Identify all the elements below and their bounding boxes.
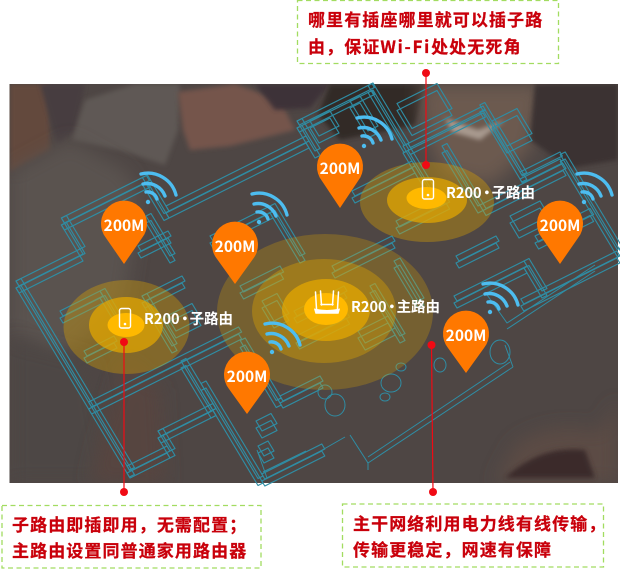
callout: bottom right: 传输更稳定，网速有保障 <box>353 536 552 561</box>
callout: bottom left: 主路由设置同普通家用路由器 <box>12 537 247 562</box>
callout: bottom right <box>342 504 606 567</box>
label: top-right sub-router: R200·子路由 <box>446 182 535 203</box>
speed pin 6 <box>443 311 489 373</box>
coverage: top-right sub-router <box>360 162 494 242</box>
wifi icon 1 <box>141 173 176 204</box>
label: main router: R200·主路由 <box>351 296 440 317</box>
speed pin 2 <box>212 222 258 284</box>
speed pin 1: 200M <box>104 214 144 236</box>
wifi icon 5 <box>265 323 300 354</box>
callout line: right <box>428 341 437 496</box>
label: left sub-router: R200·子路由 <box>144 308 233 329</box>
speed pin 5 <box>224 352 270 414</box>
wifi icon 6 <box>483 283 518 314</box>
wifi icon 4 <box>577 173 612 204</box>
icon: left sub-router phone shape <box>120 308 130 328</box>
callout: bottom right: 主干网络利用电力线有线传输， <box>353 510 606 535</box>
coverage: main router <box>217 234 433 390</box>
wifi icon 3 <box>357 117 392 148</box>
speed pin 1 <box>101 201 147 264</box>
callout line: left <box>120 338 128 496</box>
icon: top-right sub-router phone shape <box>422 180 434 199</box>
speed pin 4: 200M <box>540 214 580 236</box>
wifi icon 2 <box>252 193 287 224</box>
icon: main router <box>315 291 339 313</box>
speed pin 6: 200M <box>446 324 486 346</box>
callout: top: 由，保证Wi-Fi处处无死角 <box>308 33 522 58</box>
callout: bottom left <box>2 506 261 568</box>
speed pin 4 <box>537 201 583 264</box>
speed pin 3: 200M <box>320 157 360 179</box>
callout: bottom left: 子路由即插即用，无需配置； <box>12 511 247 536</box>
callout line: top <box>422 69 430 169</box>
coverage: left sub-router <box>64 280 190 374</box>
speed pin 2: 200M <box>215 235 255 257</box>
speed pin 5: 200M <box>227 365 267 387</box>
callout: top: 哪里有插座哪里就可以插子路 <box>308 6 543 31</box>
speed pin 3 <box>317 144 363 208</box>
callout: top <box>298 0 558 64</box>
background photo: family on sofa <box>10 84 618 483</box>
